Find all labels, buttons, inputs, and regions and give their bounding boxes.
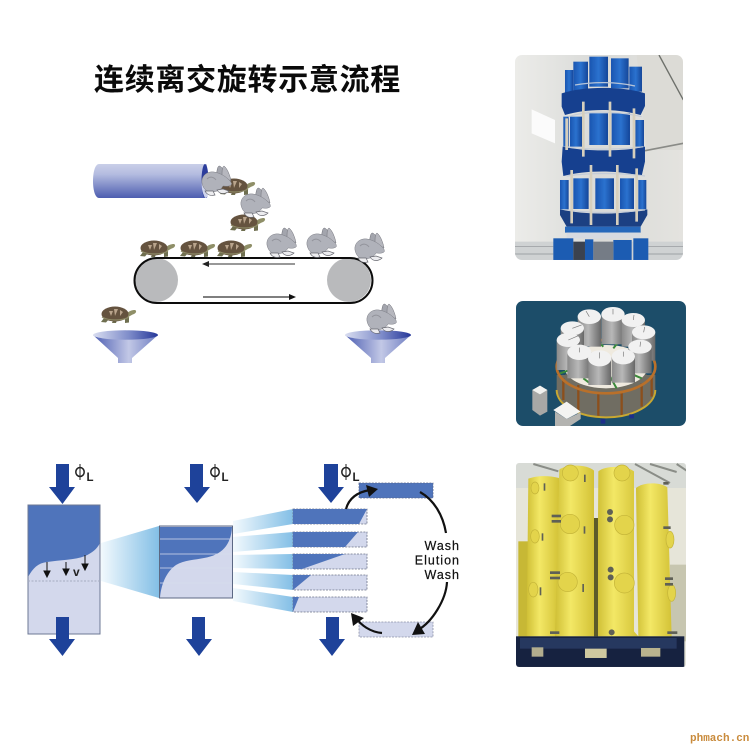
recycle arrows	[346, 485, 447, 635]
flux labels	[76, 464, 360, 484]
panel: column scale-down diagram	[28, 464, 460, 656]
turtles	[101, 178, 265, 323]
flow arrows out	[49, 617, 345, 656]
label: wash elution wash: Wash	[424, 568, 460, 582]
column rows	[560, 57, 646, 209]
title: 连续离交旋转示意流程	[94, 64, 401, 97]
panel: conveyor belt diagram	[93, 164, 411, 363]
funnel: left	[93, 330, 158, 363]
flux labels: L	[86, 472, 94, 484]
columns	[527, 466, 672, 636]
velocity arrows	[44, 555, 88, 577]
manway disks	[529, 465, 676, 601]
photo: 3D rotary column model	[516, 301, 686, 426]
photo: blue column tower	[515, 55, 683, 260]
photo: yellow columns	[516, 463, 687, 668]
funnel: right	[345, 330, 411, 363]
flux labels: L	[222, 472, 229, 484]
arrow: belt bottom moving right	[203, 294, 296, 300]
nozzles	[540, 475, 677, 635]
fans: column 2 to strips	[233, 509, 293, 612]
column 2	[160, 526, 232, 598]
top wash rectangle	[359, 483, 433, 498]
label: wash elution wash: Elution	[415, 554, 460, 568]
label: v: v	[73, 565, 80, 579]
bottom wash rectangle	[359, 622, 433, 637]
flow arrows in	[49, 464, 344, 504]
control boxes	[532, 386, 581, 426]
cylinders	[557, 307, 655, 385]
label: wash elution wash: Wash	[424, 539, 460, 553]
watermark: phmach.cn	[690, 733, 749, 745]
column 1	[28, 505, 100, 634]
pipe	[93, 164, 208, 198]
rabbits	[202, 166, 396, 333]
strips: sliced column	[293, 509, 367, 612]
dark ring bands	[562, 88, 645, 115]
flux labels: L	[352, 472, 360, 484]
label: wash elution wash	[415, 539, 460, 582]
carousel frame	[557, 340, 655, 424]
conveyor belt	[134, 258, 372, 303]
fan: column 1 to column 2	[101, 526, 159, 598]
base platform	[516, 636, 684, 667]
arrow: belt top moving left	[202, 261, 295, 267]
